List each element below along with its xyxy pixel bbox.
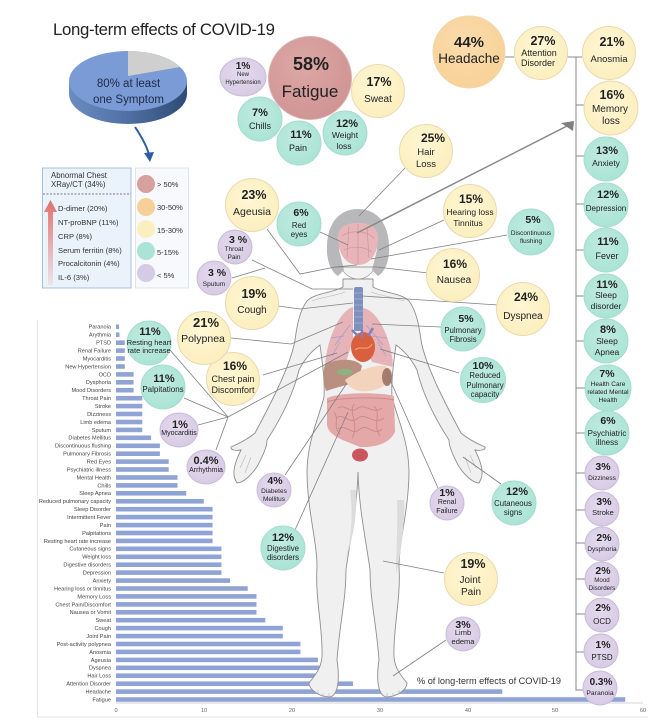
bubble: myocarditis: Myocarditis xyxy=(161,430,197,437)
bladder xyxy=(352,448,368,462)
bubble: cutaneous signs: signs xyxy=(504,508,522,517)
bubble: weight loss: 12% xyxy=(336,118,358,130)
bubble: PTSD: PTSD xyxy=(591,653,613,662)
bubble: hair loss: 25% xyxy=(421,131,445,145)
bar chart: % of long-term effects: Mood Disorders xyxy=(72,388,111,394)
bubble: dysphoria xyxy=(585,527,619,561)
bubble: dizziness: 3% xyxy=(595,461,611,473)
bubble: renal failure xyxy=(430,486,464,520)
bar chart: % of long-term effects: 50 xyxy=(552,708,558,714)
bubble: headache xyxy=(433,16,505,88)
bubble: throat pain: 3 % xyxy=(229,234,248,246)
panel: abnormal lab markers: Abnormal Chest xyxy=(51,171,108,180)
bubble: fever: 11% xyxy=(597,236,619,248)
bar chart: % of long-term effects: Ageusia xyxy=(91,658,112,664)
bubble: pulmonary fibrosis: Fibrosis xyxy=(449,335,477,344)
bubble: joint pain: Pain xyxy=(461,587,481,598)
bubble: limb edema: 3% xyxy=(455,619,471,631)
bubble: stroke xyxy=(585,492,619,526)
chart axis caption: % of long-term effects of COVID-19 xyxy=(417,676,561,686)
bar chart: % of long-term effects: Myocarditis xyxy=(83,356,111,362)
bubble: limb edema xyxy=(446,617,480,651)
bubble: palpitations: Palpitations xyxy=(142,385,184,394)
bracket: symptom list connector xyxy=(504,57,585,690)
bubbles xyxy=(127,16,638,705)
gallbladder xyxy=(337,368,353,376)
bubble: hair loss: Hair xyxy=(417,147,435,158)
head: hair and face xyxy=(327,209,389,279)
bubble: psychiatric illness xyxy=(585,411,629,455)
bar chart: % of long-term effects: Psychiatric illness xyxy=(67,467,111,473)
bubble: OCD: OCD xyxy=(593,617,611,626)
bar chart: % of long-term effects: Pulmonary Fibrosis xyxy=(63,452,111,458)
bar chart: % of long-term effects: Memory Loss xyxy=(77,594,111,600)
bubble: anxiety: Anxiety xyxy=(592,158,621,168)
stomach xyxy=(345,366,389,391)
bubble: discontinuous flushing: Discontinuous xyxy=(511,230,551,237)
bar chart: % of long-term effects: Intermittent Fever xyxy=(67,515,111,521)
bubble: anosmia: Anosmia xyxy=(591,54,628,65)
bar chart: % of long-term effects: 0 xyxy=(114,708,118,714)
arrow: brain to neuro symptoms xyxy=(357,121,574,233)
bubble: arrhythmia: 0.4% xyxy=(193,455,219,467)
bubble: hair loss: Loss xyxy=(416,159,436,170)
bubble: reduced pulmonary capacity: capacity xyxy=(471,390,499,399)
bubble: chills: 7% xyxy=(252,107,268,119)
bubble: health care related mental health: related Mental xyxy=(587,389,629,396)
bubble: cutaneous signs: Cutaneous xyxy=(494,499,532,508)
bubble: diabetes mellitus: 4% xyxy=(267,475,283,487)
bubble: anosmia: 21% xyxy=(599,35,625,49)
bubble: red eyes: eyes xyxy=(291,230,307,239)
bubble: dysphoria: Dysphoria xyxy=(587,546,617,553)
bubble: memory loss: Memory xyxy=(592,104,628,115)
bubble: throat pain xyxy=(218,230,252,264)
bubble: health care related mental health: 7% xyxy=(599,368,615,380)
bubble: PTSD: 1% xyxy=(595,639,611,651)
bubble: reduced pulmonary capacity: Pulmonary xyxy=(466,381,504,390)
bar chart: % of long-term effects: Joint Pain xyxy=(86,634,111,640)
bubble: digestive disorders xyxy=(261,526,305,570)
bubble: arrhythmia xyxy=(187,450,225,484)
bar chart: % of long-term effects xyxy=(38,320,648,717)
bar chart: % of long-term effects: Fatigue xyxy=(92,697,111,703)
leader lines xyxy=(170,168,507,676)
bar chart: % of long-term effects: Post-activity polypnea xyxy=(57,642,112,648)
panel: abnormal lab markers xyxy=(42,168,131,288)
bubble: resting heart rate increase: rate increase xyxy=(127,346,171,355)
bubble: myocarditis xyxy=(160,413,198,447)
bubble: anxiety: 13% xyxy=(596,145,618,157)
bubble: joint pain xyxy=(444,552,498,606)
bubble: diabetes mellitus: Mellitus xyxy=(263,496,286,503)
bubble: palpitations: 11% xyxy=(153,373,175,385)
bubble: PTSD xyxy=(584,634,618,668)
bubble: resting heart rate increase: Resting heart xyxy=(127,338,172,347)
bar chart: % of long-term effects: Mental Health xyxy=(76,475,111,481)
bubble: dizziness xyxy=(585,456,619,490)
bubble: dizziness: Dizziness xyxy=(588,475,617,482)
bubble: ageusia: Ageusia xyxy=(233,206,271,218)
bubble: weight loss xyxy=(323,111,367,155)
bubble: red eyes xyxy=(277,202,321,246)
bubble: attention disorder: 27% xyxy=(530,34,556,48)
bar chart: % of long-term effects: Sleep Apnea xyxy=(79,491,112,497)
bubble: ageusia: 23% xyxy=(241,188,267,202)
bubble: hearing loss tinnitus: Tinnitus xyxy=(453,218,483,228)
bubble: pulmonary fibrosis: 5% xyxy=(458,313,474,325)
bubble: headache: Headache xyxy=(438,51,500,66)
bar chart: % of long-term effects: Cutaneous signs xyxy=(69,547,111,553)
arrow: pie to biomarkers xyxy=(135,127,154,162)
bubble: sputum: 3 % xyxy=(208,267,227,279)
bar chart: % of long-term effects: Stroke xyxy=(95,404,111,410)
bubble: depression: Depression xyxy=(586,204,626,213)
bubble: renal failure: 1% xyxy=(439,487,455,499)
bubble: chest pain discomfort xyxy=(206,352,260,406)
bubble: memory loss: 16% xyxy=(599,88,625,102)
bar chart: % of long-term effects: Attention Disorder xyxy=(66,682,111,688)
bar chart: % of long-term effects: Resting heart rate increase xyxy=(44,539,111,545)
bar chart: % of long-term effects: Reduced pulmonary capacity xyxy=(39,499,111,505)
bubble: psychiatric illness: illness xyxy=(596,438,618,447)
heart xyxy=(351,328,375,362)
bubble: nausea: 16% xyxy=(443,257,467,271)
bubble: digestive disorders: disorders xyxy=(267,553,299,562)
bubble: diabetes mellitus: Diabetes xyxy=(261,488,288,495)
bubble: paranoia: Paranoia xyxy=(586,690,614,697)
bubble: attention disorder: Attention xyxy=(521,48,557,58)
bubble: myocarditis: 1% xyxy=(172,419,188,431)
bubble: nausea xyxy=(426,248,480,302)
bubble: throat pain: Pain xyxy=(227,254,241,261)
bubble: stroke: 3% xyxy=(596,496,612,508)
bubble: sleep apnea: Apnea xyxy=(595,347,620,357)
bubble: polypnea: 21% xyxy=(193,315,219,330)
bubble: sleep disorder: 11% xyxy=(596,279,618,291)
bubble: diabetes mellitus xyxy=(257,473,291,507)
bubble: OCD xyxy=(585,598,619,632)
bar chart: % of long-term effects: 20 xyxy=(289,708,295,714)
body figure with organs xyxy=(231,209,485,697)
bubble: cough: 19% xyxy=(241,287,267,301)
bar chart: % of long-term effects: Nausea or Vomit xyxy=(70,610,111,616)
bubble: fatigue xyxy=(268,36,352,120)
bubble: red eyes: 6% xyxy=(293,207,309,219)
bubble: new hypertension: 1% xyxy=(236,61,250,72)
bubble: pain xyxy=(277,121,321,165)
bubble: dyspnea: 24% xyxy=(514,290,538,304)
bubble: new hypertension xyxy=(220,58,266,96)
bubble: pulmonary fibrosis xyxy=(441,307,485,351)
bubble: depression xyxy=(584,183,628,227)
bubble: limb edema: edema xyxy=(452,637,475,646)
bubble: palpitations xyxy=(141,365,185,409)
panel: abnormal lab markers: NT-proBNP (11%) xyxy=(58,218,119,227)
bubble: stroke: Stroke xyxy=(592,508,614,517)
bubble: arrhythmia: Arrhythmia xyxy=(189,467,223,474)
bubble: chest pain discomfort: 16% xyxy=(223,359,247,373)
bar chart: % of long-term effects: Cough xyxy=(95,626,111,632)
bubble: health care related mental health xyxy=(585,365,631,411)
bubble: discontinuous flushing: flushing xyxy=(520,238,542,245)
bar chart: % of long-term effects: Digestive disorders xyxy=(63,563,111,569)
bubble: digestive disorders: 12% xyxy=(272,532,294,544)
bubble: hearing loss tinnitus: Hearing loss xyxy=(446,207,494,217)
bubble: reduced pulmonary capacity: 10% xyxy=(472,360,494,372)
bubble: sleep disorder: disorder xyxy=(591,301,622,311)
panel: abnormal lab markers: IL-6 (3%) xyxy=(58,273,90,282)
panel: abnormal lab markers: Serum ferritin (8%) xyxy=(58,246,122,255)
panel: abnormal lab markers: XRay/CT (34%) xyxy=(51,180,106,189)
bar chart: % of long-term effects: Sleep Disorder xyxy=(74,507,111,513)
bubble: ageusia xyxy=(226,178,278,232)
legend: colour scale: > 50% xyxy=(157,180,179,189)
bar chart: % of long-term effects: Hair Loss xyxy=(87,674,111,680)
bar chart: % of long-term effects: Arythmia xyxy=(89,333,112,339)
bubble: weight loss: Weight xyxy=(332,130,359,140)
bubble: discontinuous flushing: 5% xyxy=(525,214,541,226)
bar chart: % of long-term effects: Dysphoria xyxy=(86,380,112,386)
bar chart: % of long-term effects: OCD xyxy=(99,372,111,378)
bubble: polypnea xyxy=(178,312,230,364)
bar chart: % of long-term effects: 40 xyxy=(465,708,471,714)
pie chart: 80% at least one symptom xyxy=(69,51,187,124)
bubble: sputum xyxy=(197,261,231,295)
bar chart: % of long-term effects: Diabetes Mellitus xyxy=(68,436,111,442)
bubble: OCD: 2% xyxy=(595,602,611,614)
bar chart: % of long-term effects: 30 xyxy=(377,708,383,714)
bubble: attention disorder: Disorder xyxy=(521,58,555,68)
bar chart: % of long-term effects: Weight loss xyxy=(82,555,111,561)
bar chart: % of long-term effects: Depression xyxy=(83,570,111,576)
bubble: renal failure: Failure xyxy=(436,508,458,515)
panel: abnormal lab markers: D-dimer (20%) xyxy=(58,204,108,213)
bubble: sleep apnea: 8% xyxy=(600,324,616,336)
bubble: fatigue: 58% xyxy=(293,54,329,74)
bubble: red eyes: Red xyxy=(292,221,306,230)
bubble: depression: 12% xyxy=(597,189,619,201)
bubble: mood disorders: 2% xyxy=(595,565,611,577)
bubble: resting heart rate increase: 11% xyxy=(139,326,161,338)
lungs xyxy=(325,307,393,367)
bar chart: % of long-term effects: Chest Pain/Discomfort xyxy=(55,602,111,608)
bubble: sweat: Sweat xyxy=(364,94,392,105)
bubble: cough: Cough xyxy=(237,305,267,316)
bubble: pulmonary fibrosis: Pulmonary xyxy=(444,326,482,335)
bubble: mood disorders: Disorders xyxy=(589,585,615,592)
legend: colour scale: < 5% xyxy=(157,271,175,280)
bubble: mood disorders: Mood xyxy=(594,577,610,584)
bubble: weight loss: loss xyxy=(336,141,352,151)
legend: colour scale xyxy=(136,168,188,288)
bubble: memory loss: loss xyxy=(602,116,620,127)
bubble: discontinuous flushing xyxy=(508,209,554,255)
bar chart: % of long-term effects: Dyspnea xyxy=(89,666,112,672)
bubble: reduced pulmonary capacity: Reduced xyxy=(469,371,501,380)
bar chart: % of long-term effects: Red Eyes xyxy=(87,460,111,466)
bubble: new hypertension: New xyxy=(237,72,250,78)
bubble: psychiatric illness: 6% xyxy=(600,415,616,427)
bubble: memory loss xyxy=(584,81,638,135)
bubble: cutaneous signs xyxy=(492,481,536,525)
bubble: anxiety xyxy=(584,137,628,181)
title: Long-term effects of COVID-19 xyxy=(53,20,275,39)
bar chart: % of long-term effects: Hearing loss or tinnitus xyxy=(54,586,111,592)
legend: colour scale: 5-15% xyxy=(157,248,179,257)
bar chart: % of long-term effects: Sweat xyxy=(95,618,111,624)
bubble: sweat: 17% xyxy=(366,75,392,89)
bubble: paranoia xyxy=(583,671,617,705)
bubble: sleep disorder: Sleep xyxy=(595,290,617,300)
bubble: hair loss xyxy=(400,124,452,178)
bar chart: % of long-term effects: Palpitations xyxy=(82,531,111,537)
bubble: reduced pulmonary capacity xyxy=(460,358,506,402)
bar chart: % of long-term effects: New Hypertension xyxy=(65,364,111,370)
legend: colour scale: 30-50% xyxy=(157,203,183,212)
bubble: joint pain: 19% xyxy=(460,557,486,571)
intestines xyxy=(327,393,395,447)
bubble: hearing loss tinnitus: 15% xyxy=(459,192,483,206)
bubble: dysphoria: 2% xyxy=(596,532,612,544)
bubble: polypnea: Polypnea xyxy=(181,333,225,345)
bar chart: % of long-term effects: Headache xyxy=(85,690,111,696)
trachea xyxy=(354,287,363,331)
bubble: psychiatric illness: Psychiatric xyxy=(588,429,626,438)
bubble: health care related mental health: Health xyxy=(599,397,618,404)
bar chart: % of long-term effects: Anxiety xyxy=(93,578,111,584)
bubble: hearing loss tinnitus xyxy=(444,184,496,238)
bubble: sleep apnea xyxy=(584,319,628,363)
bar chart: % of long-term effects: Anosmia xyxy=(89,650,112,656)
bar chart: % of long-term effects: Paranoia xyxy=(89,325,112,331)
bubble: fatigue: Fatigue xyxy=(282,82,338,101)
bubble: fever xyxy=(584,228,628,272)
bubble: new hypertension: Hypertension xyxy=(225,80,261,86)
spleen and kidney xyxy=(382,368,392,386)
bar chart: % of long-term effects: Dizziness xyxy=(87,412,111,418)
pie chart: 80% at least one symptom: 80% at least xyxy=(97,78,161,90)
bar chart: % of long-term effects: PTSD xyxy=(96,341,111,347)
bar chart: % of long-term effects: Renal Failure xyxy=(78,348,111,354)
bubble: limb edema: Limb xyxy=(455,628,471,637)
bubble: mood disorders xyxy=(585,562,619,596)
bubble: sleep disorder xyxy=(584,274,628,318)
pie chart: 80% at least one symptom: one Symptom xyxy=(93,94,164,106)
panel: abnormal lab markers: CRP (8%) xyxy=(58,232,93,241)
liver xyxy=(324,360,362,391)
bubble: resting heart rate increase xyxy=(127,321,172,365)
bar chart: % of long-term effects: Throat Pain xyxy=(82,396,111,402)
bubble: cutaneous signs: 12% xyxy=(506,486,528,498)
bubble: chills: Chills xyxy=(249,121,271,131)
bar chart: % of long-term effects: Limb edema xyxy=(80,420,112,426)
bubble: cough xyxy=(226,276,278,330)
bar chart: % of long-term effects: 10 xyxy=(201,708,207,714)
legend: colour scale: 15-30% xyxy=(157,226,183,235)
bubble: sputum: Sputum xyxy=(203,281,225,288)
bar chart: % of long-term effects: 60 xyxy=(640,708,646,714)
bubble: fever: Fever xyxy=(595,251,619,261)
bubble: chest pain discomfort: Chest pain xyxy=(211,374,255,384)
bubble: health care related mental health: Health Care xyxy=(591,381,626,388)
bar chart: % of long-term effects: Discontinuous flushing xyxy=(55,444,111,450)
bubble: paranoia: 0.3% xyxy=(590,677,613,688)
panel: abnormal lab markers: Procalcitonin (4%) xyxy=(58,259,120,268)
bubble: chills xyxy=(238,97,282,141)
bubble: joint pain: Joint xyxy=(459,575,481,586)
bubble: chest pain discomfort: Discomfort xyxy=(211,385,255,395)
bubble: digestive disorders: Digestive xyxy=(267,544,299,553)
bubble: attention disorder xyxy=(514,26,568,80)
bubble: headache: 44% xyxy=(454,34,484,51)
bubble: pain: 11% xyxy=(290,129,312,141)
bubble: anosmia xyxy=(582,26,636,80)
bar chart: % of long-term effects: Sputum xyxy=(92,428,111,434)
bubble: pain: Pain xyxy=(289,143,307,153)
bubble: sweat xyxy=(352,64,404,118)
bubble: dyspnea xyxy=(496,282,550,336)
bubble: sleep apnea: Sleep xyxy=(596,336,618,346)
bar chart: % of long-term effects: Chills xyxy=(97,483,111,489)
bubble: dyspnea: Dyspnea xyxy=(503,311,543,322)
bubble: nausea: Nausea xyxy=(437,275,472,286)
bar chart: % of long-term effects: Pain xyxy=(100,523,111,529)
bubble: renal failure: Renal xyxy=(438,499,457,506)
bubble: throat pain: Throat xyxy=(225,246,244,253)
